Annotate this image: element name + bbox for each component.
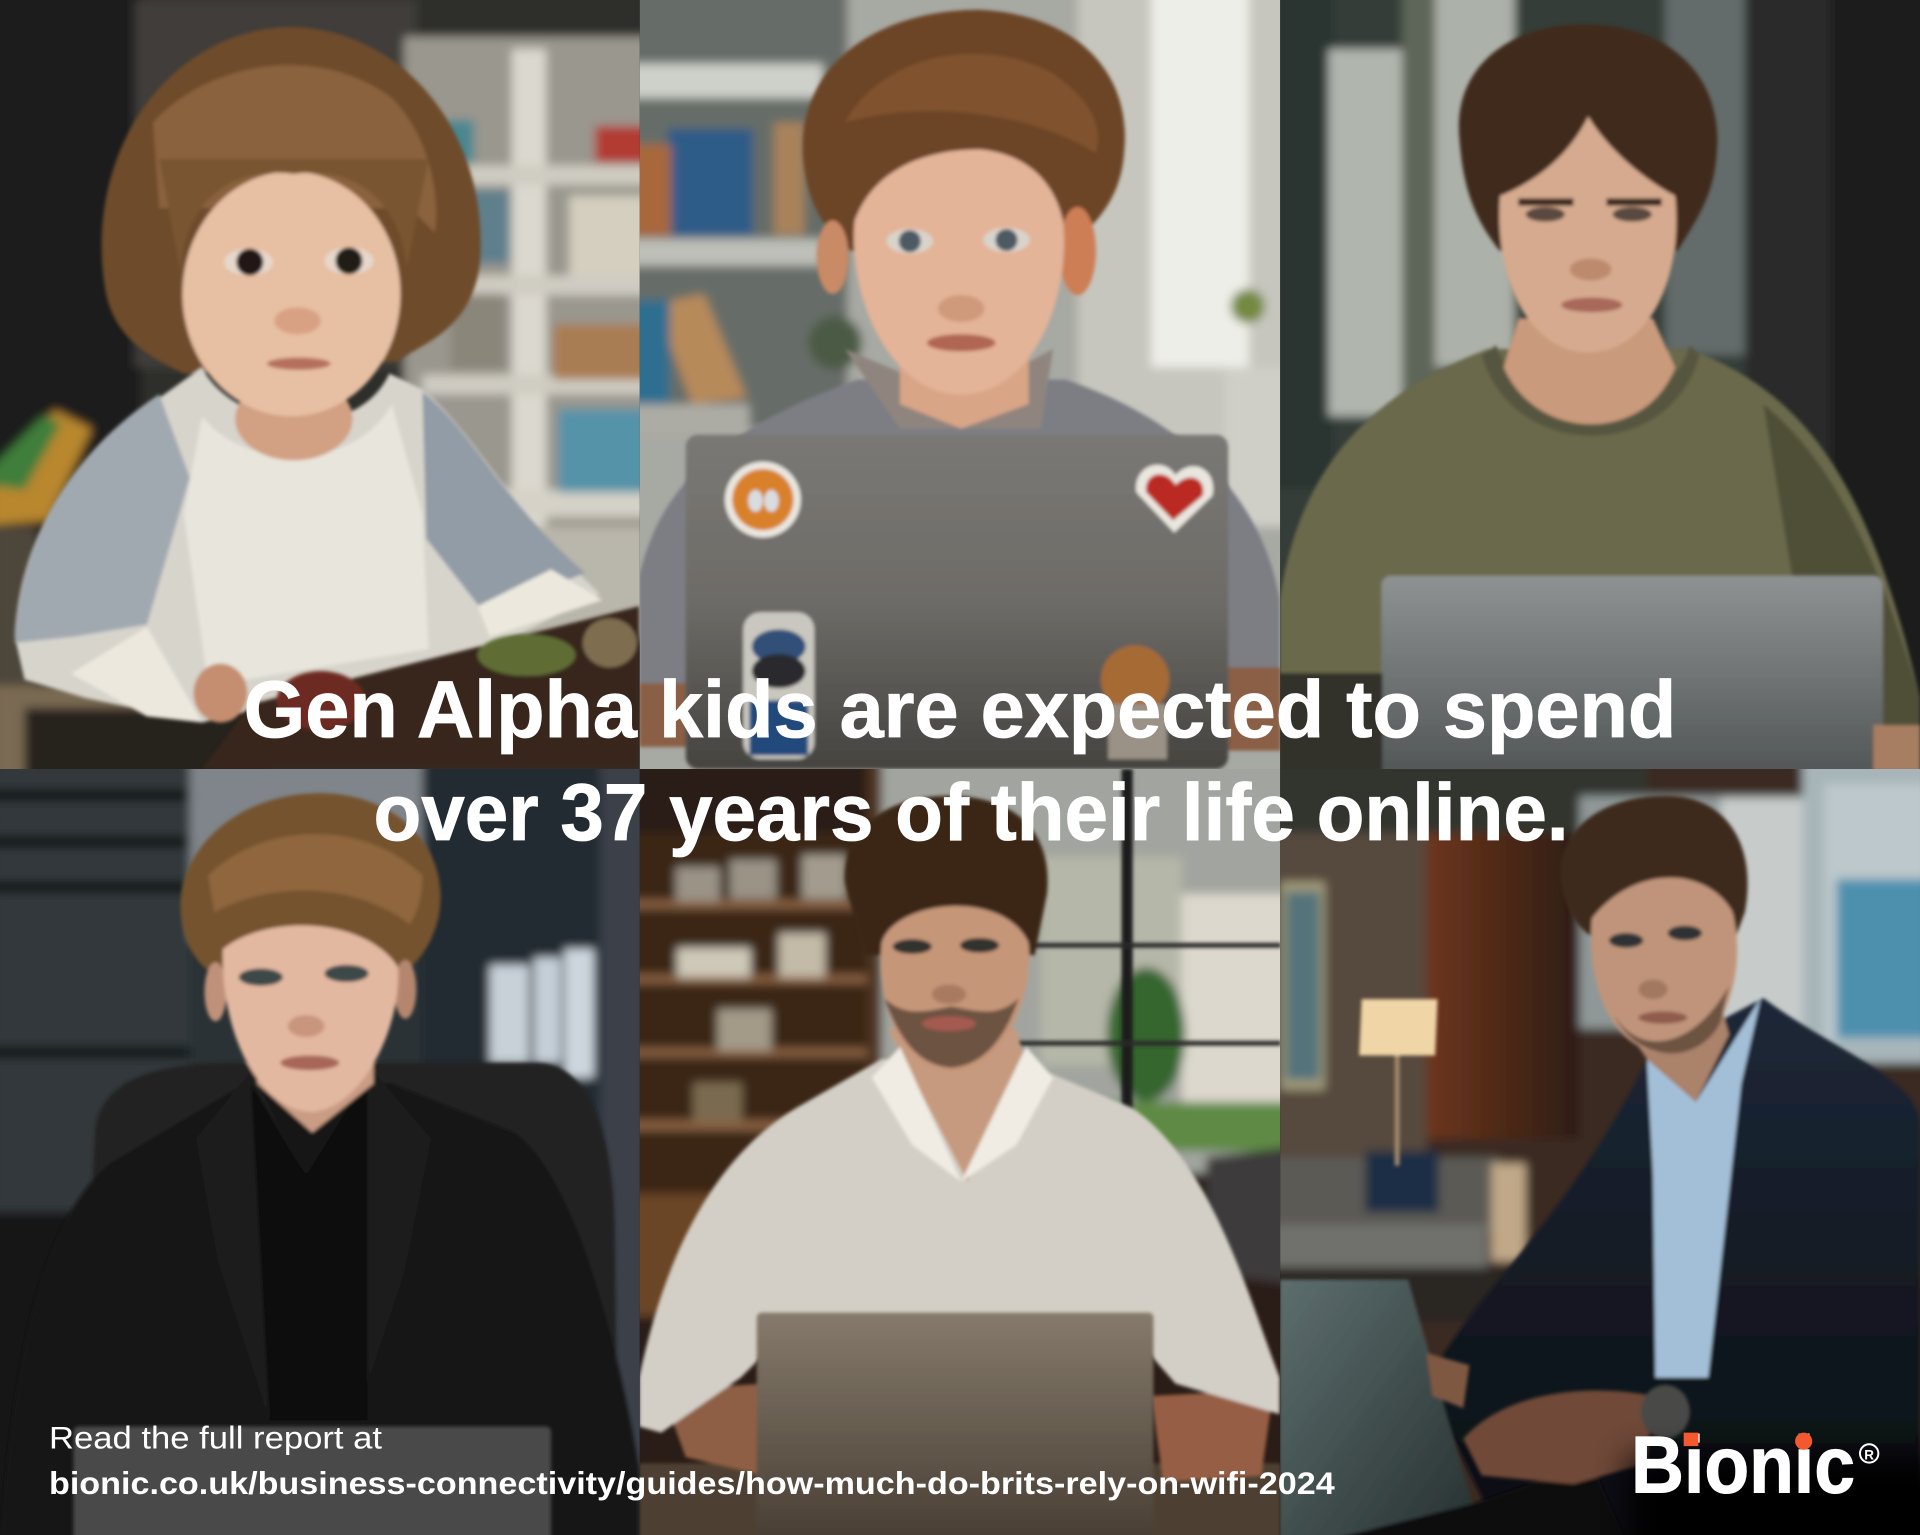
teenager figure bbox=[1280, 24, 1920, 793]
logo: Bionic: R bbox=[1864, 1448, 1874, 1463]
toddler laptop with stickers bbox=[202, 606, 639, 769]
floor lamp bbox=[1359, 999, 1438, 1166]
panel: man in navy blazer bbox=[1255, 744, 1920, 1535]
footer: report link bbox=[49, 1420, 1335, 1501]
white shirt background: bookcase and garden window bbox=[640, 769, 1280, 1466]
laptop and hands bbox=[1280, 1280, 1690, 1535]
panel: man in white shirt bbox=[640, 769, 1280, 1535]
title bbox=[244, 665, 1676, 858]
teenager laptop bbox=[1280, 573, 1920, 769]
teenager background: curtains bbox=[1280, 0, 1920, 692]
title: Gen Alpha kids are expected to spend bbox=[244, 665, 1676, 755]
blazer figure bbox=[1427, 796, 1920, 1535]
boy laptop lid with stickers bbox=[686, 435, 1228, 769]
title: over 37 years of their life online. bbox=[373, 768, 1569, 858]
panel: young man in black suit bbox=[0, 744, 665, 1535]
toddler figure bbox=[15, 27, 602, 722]
boy figure bbox=[639, 10, 1281, 751]
footer: report link: Read the full report at bbox=[49, 1420, 382, 1456]
white shirt laptop bbox=[757, 1313, 1153, 1535]
window frame bars bbox=[1018, 769, 1280, 1110]
blazer background: lounge and window bbox=[1255, 744, 1920, 1535]
dark corner behind logo bbox=[1629, 1457, 1920, 1535]
panel: school-age boy behind stickered laptop bbox=[640, 0, 1280, 769]
logo: Bionic: Bionic bbox=[1631, 1421, 1855, 1511]
young man laptop bbox=[73, 1427, 551, 1535]
young man figure in chair bbox=[66, 790, 640, 1535]
panel: toddler at laptop bbox=[0, 0, 665, 793]
young man background: office windows bbox=[0, 744, 665, 1535]
toddler background: room and bookshelf bbox=[0, 0, 665, 793]
footer: report link: bionic.co.uk/business-connectivity/guides/how-much-do-brits-rely-on-wifi-2024 bbox=[49, 1465, 1335, 1501]
white shirt figure bbox=[639, 796, 1281, 1535]
boy background: shelves and bright wall bbox=[640, 0, 1280, 769]
panel: teenager in olive t-shirt bbox=[1255, 0, 1920, 793]
